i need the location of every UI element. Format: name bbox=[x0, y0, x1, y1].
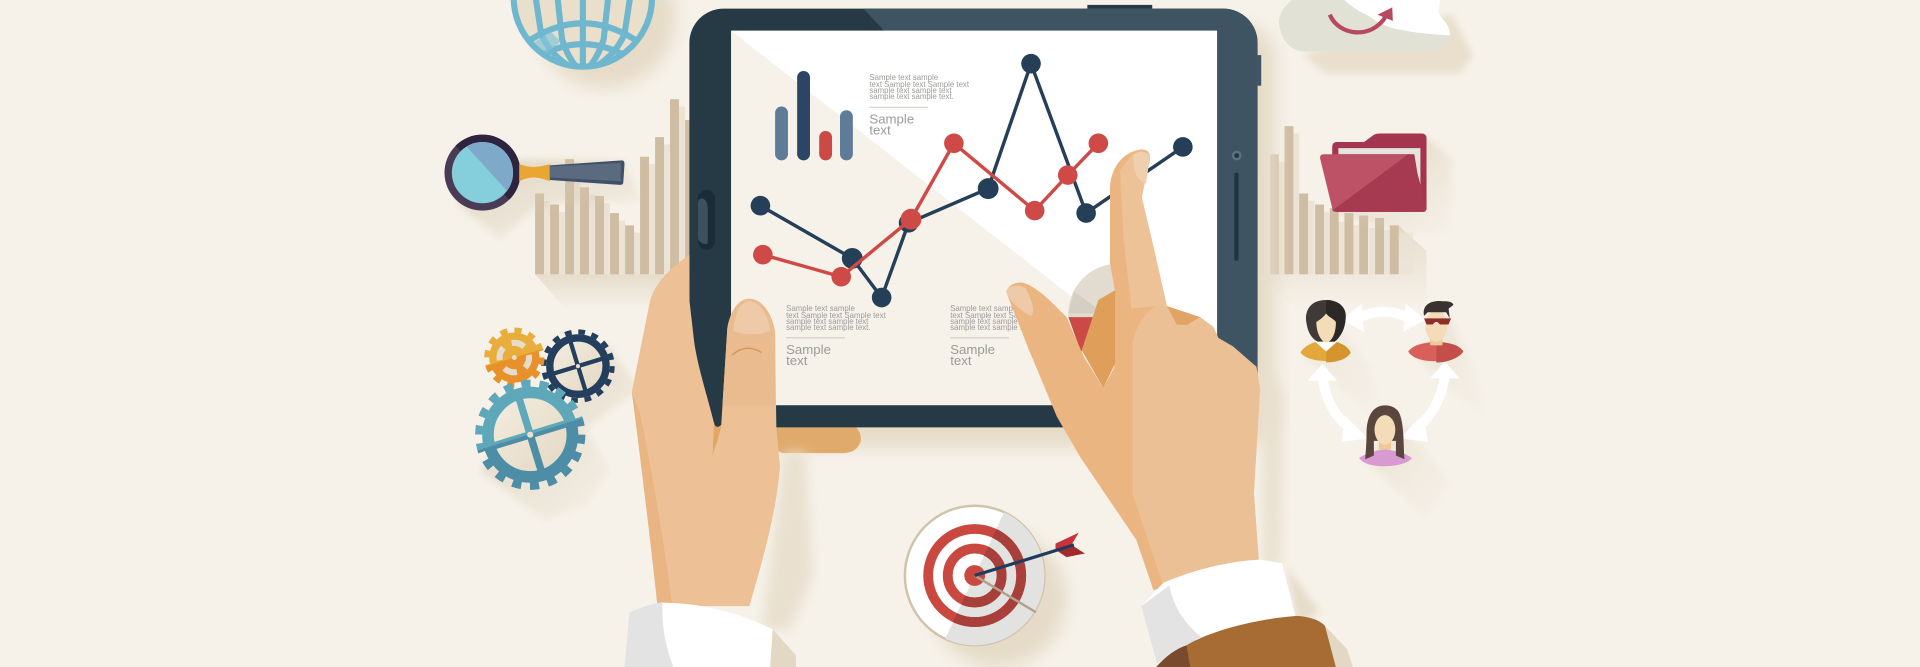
right hand bbox=[1006, 149, 1320, 624]
text block: bottom left: text bbox=[786, 353, 808, 368]
text block: bottom left: Sample text sample bbox=[786, 304, 855, 313]
text block: top: sample text sample text. bbox=[869, 92, 954, 101]
cloud icon bbox=[1279, 0, 1473, 73]
text block: bottom left: sample text sample text. bbox=[786, 323, 871, 332]
red data series bbox=[753, 133, 1108, 287]
gear: gold bbox=[487, 330, 542, 385]
text block: top: Sample bbox=[869, 112, 914, 127]
tablet side button bbox=[1258, 55, 1261, 86]
arrows between people bbox=[1308, 304, 1460, 442]
gauge on screen bbox=[1068, 264, 1157, 353]
text block: bottom middle: sample text sample text bbox=[950, 317, 1033, 326]
text block: bottom left bbox=[786, 304, 887, 368]
left shirt cuff bbox=[624, 602, 796, 667]
back bar chart right bbox=[1255, 126, 1427, 311]
text block: bottom middle: Sample text sample bbox=[950, 304, 1019, 313]
text block: top: text Sample text Sample text bbox=[869, 80, 970, 89]
tablet shadow bbox=[708, 24, 1276, 448]
magnifying glass icon bbox=[444, 135, 642, 239]
small bar chart on screen bbox=[775, 71, 853, 160]
right jacket sleeve bbox=[1156, 616, 1353, 667]
gears icon bbox=[475, 329, 639, 520]
tablet screen bbox=[731, 31, 1217, 410]
back bar chart left bbox=[535, 99, 694, 311]
thumb nail bbox=[1006, 286, 1033, 316]
illustration: tablet analytics scene bbox=[444, 0, 1474, 667]
home button bbox=[698, 190, 715, 250]
gear: teal bbox=[475, 380, 585, 490]
knuckle crease bbox=[1167, 306, 1200, 325]
text block: bottom left: text Sample text Sample text bbox=[786, 311, 887, 320]
web between thumb and finger bbox=[1082, 290, 1115, 388]
tablet top button bbox=[1087, 5, 1152, 9]
globe icon bbox=[512, 0, 676, 88]
icon: curved arrow bbox=[1330, 7, 1393, 32]
back of hand bbox=[1133, 306, 1260, 585]
line chart on screen bbox=[751, 54, 1193, 307]
text block: top: text bbox=[869, 123, 891, 138]
target icon bbox=[904, 504, 1085, 667]
speaker slit bbox=[1234, 173, 1239, 261]
left hand bbox=[632, 255, 813, 631]
text block: bottom left: Sample bbox=[786, 342, 831, 357]
gear: navy bbox=[541, 329, 615, 403]
index fingernail bbox=[1133, 152, 1150, 184]
text block: bottom middle: text Sample text Sample text bbox=[950, 311, 1051, 320]
dart bbox=[975, 533, 1085, 576]
index finger highlight bbox=[1120, 153, 1167, 309]
navy data series bbox=[751, 54, 1193, 307]
person: woman with long hair bbox=[1359, 405, 1412, 466]
left hand fingers under tablet bbox=[776, 422, 861, 453]
text block: top: Sample text sample bbox=[869, 73, 938, 82]
text block: bottom middle: sample text sample text. bbox=[950, 323, 1035, 332]
folder icon bbox=[1320, 133, 1452, 235]
text block: top: sample text sample text bbox=[869, 86, 952, 95]
text block: top bbox=[869, 73, 970, 138]
magnifier handle bbox=[519, 160, 624, 185]
text block: bottom middle bbox=[950, 304, 1051, 368]
people network icon bbox=[1300, 300, 1488, 520]
tablet bbox=[689, 5, 1261, 427]
text block: bottom left: sample text sample text bbox=[786, 317, 869, 326]
person: man with sunglasses bbox=[1408, 301, 1463, 362]
thumb bbox=[722, 299, 775, 405]
text block: bottom middle: Sample bbox=[950, 342, 995, 357]
camera bbox=[1232, 151, 1242, 160]
person: woman with short hair bbox=[1300, 300, 1351, 362]
text block: bottom middle: text bbox=[950, 353, 972, 368]
right shirt cuff bbox=[1141, 560, 1296, 664]
